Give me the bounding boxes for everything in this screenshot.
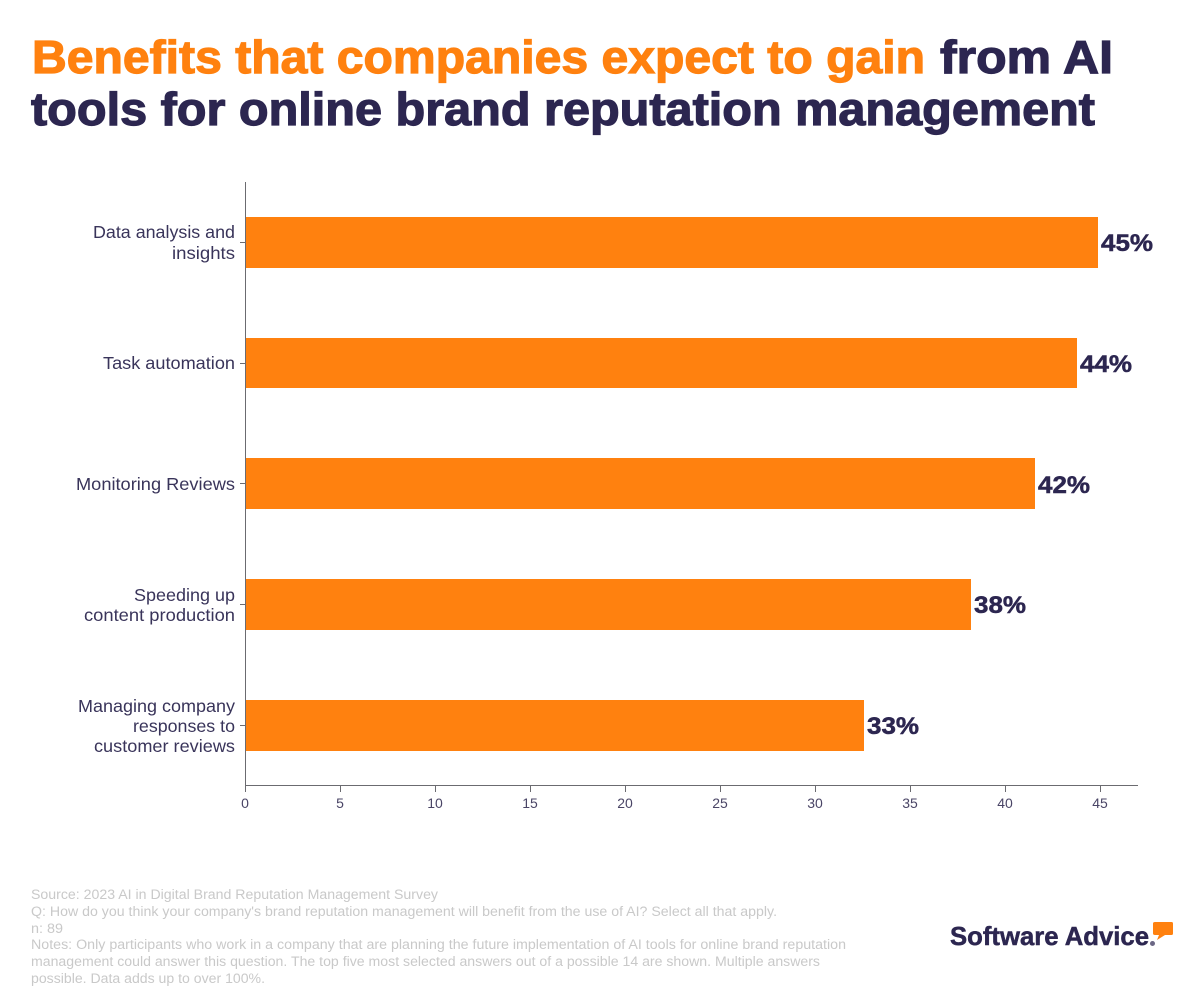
y axis labels: insights	[172, 243, 235, 263]
icon: registered mark	[1150, 941, 1155, 946]
bars	[245, 217, 1098, 751]
bar chart	[76, 182, 1153, 811]
y axis labels	[76, 222, 235, 756]
x axis labels: 35	[902, 795, 918, 811]
source and notes: Source: 2023 AI in Digital Brand Reputation Management Survey	[31, 887, 438, 902]
title: tools for online brand reputation management	[31, 83, 1095, 135]
source and notes: possible. Data adds up to over 100%.	[31, 971, 265, 986]
value labels: 45%	[1101, 230, 1153, 257]
title: from AI	[940, 31, 1113, 83]
source and notes	[31, 887, 846, 986]
value labels: 42%	[1038, 472, 1090, 499]
x axis labels: 10	[427, 795, 443, 811]
value labels: 38%	[974, 592, 1026, 619]
x axis labels: 0	[241, 795, 249, 811]
logo: Software Advice: Software Advice	[950, 921, 1149, 951]
source and notes: Notes: Only participants who work in a company that are planning the future implementation of AI tools for online brand reputation	[31, 937, 846, 952]
value labels: 33%	[867, 713, 919, 740]
y axis labels: Data analysis and	[93, 222, 235, 242]
y axis labels: customer reviews	[94, 736, 235, 756]
y axis labels: content production	[84, 605, 235, 625]
x axis labels: 30	[807, 795, 823, 811]
source and notes: n: 89	[31, 921, 63, 936]
source and notes: management could answer this question. The top five most selected answers out of a possible 14 are shown. Multiple answers	[31, 954, 820, 969]
x axis labels: 20	[617, 795, 633, 811]
value labels: 44%	[1080, 351, 1132, 378]
y axis labels: responses to	[133, 716, 235, 736]
x axis labels: 45	[1092, 795, 1108, 811]
y axis labels: Monitoring Reviews	[76, 474, 235, 494]
y axis labels: Task automation	[103, 353, 235, 373]
y axis labels: Speeding up	[134, 585, 235, 605]
source and notes: Q: How do you think your company's brand reputation management will benefit from the use of AI? Select all that apply.	[31, 904, 777, 919]
x axis labels: 15	[522, 795, 538, 811]
title	[31, 31, 1113, 135]
axes	[240, 182, 1138, 792]
value labels	[867, 230, 1153, 740]
x axis labels: 5	[336, 795, 344, 811]
y axis labels: Managing company	[78, 696, 235, 716]
icon: speech bubble	[1153, 922, 1173, 940]
x axis labels: 40	[997, 795, 1013, 811]
x axis labels: 25	[712, 795, 728, 811]
x axis labels	[241, 795, 1108, 811]
title: Benefits that companies expect to gain	[32, 31, 925, 83]
